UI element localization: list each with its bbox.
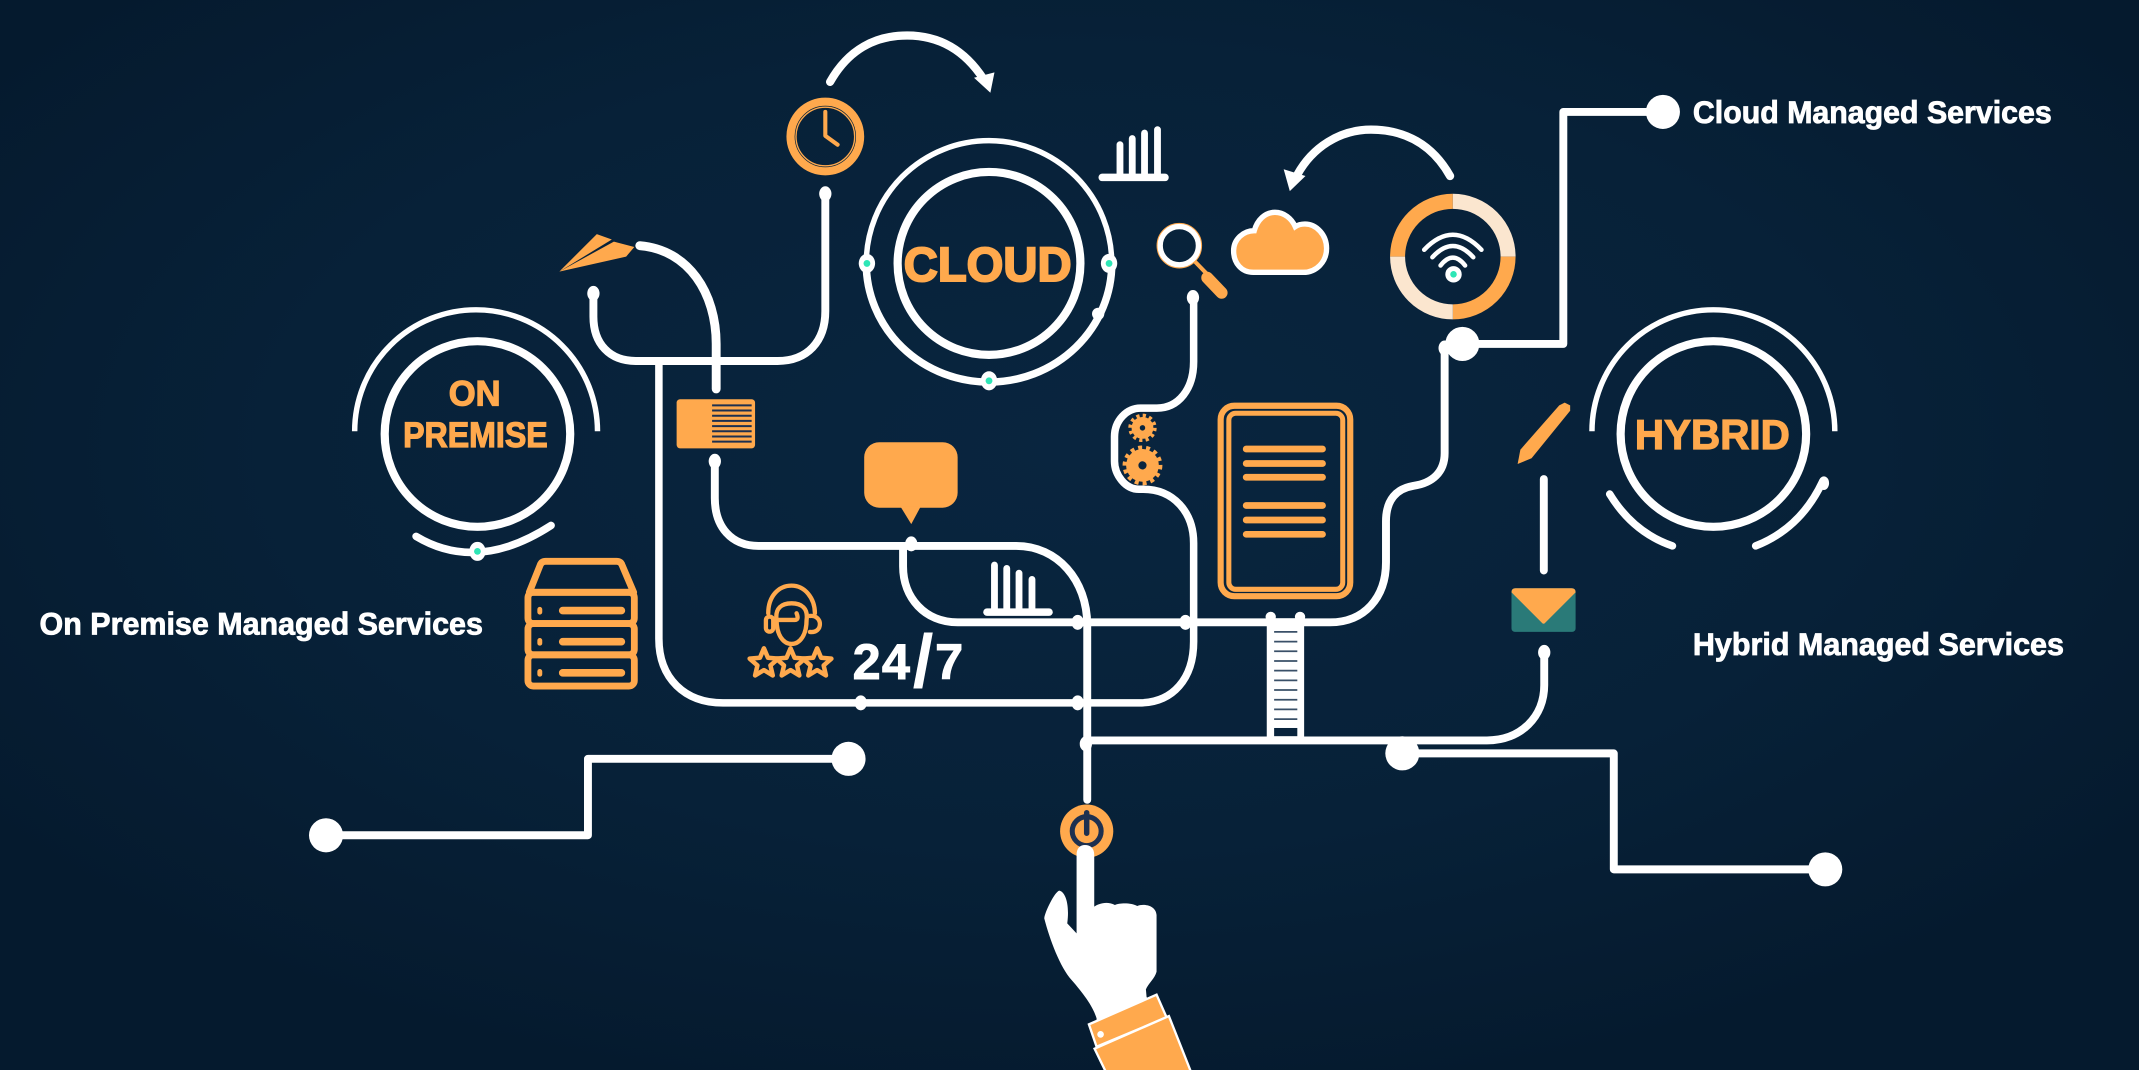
circuit lines network bbox=[326, 112, 1825, 869]
heading: cloud: CLOUD bbox=[904, 238, 1072, 292]
icon: speech bubble bbox=[864, 442, 958, 524]
heading: premise: PREMISE bbox=[403, 415, 548, 455]
heading: hybrid: HYBRID bbox=[1635, 411, 1790, 458]
text: 24/7: / bbox=[913, 619, 934, 703]
line end nodes bbox=[309, 95, 1842, 886]
arrow: upper right counter-clockwise bbox=[1284, 130, 1450, 191]
arrow: top clockwise bbox=[830, 35, 994, 93]
icon: pencil bbox=[1518, 403, 1570, 464]
icon: gears bbox=[1125, 416, 1160, 483]
icon: lower bar chart bbox=[987, 565, 1049, 612]
heading: on premise: ON bbox=[449, 373, 501, 413]
ladder connector bbox=[1266, 612, 1305, 737]
icon: server stack bbox=[528, 561, 634, 686]
panel: cloud circle bbox=[859, 141, 1117, 390]
icon: top bar chart bbox=[1102, 130, 1165, 177]
icon: document bbox=[1221, 406, 1350, 596]
icon: power button bbox=[1060, 805, 1113, 858]
icon: clock bbox=[791, 102, 860, 171]
icon: magnifier bbox=[1157, 224, 1222, 293]
icon: cloud bbox=[1234, 212, 1327, 272]
icon: pointing hand bbox=[1044, 845, 1192, 1070]
icon: envelope bbox=[1511, 588, 1576, 632]
text: 24/7: 24 bbox=[853, 633, 910, 690]
panel: on premise circle bbox=[355, 310, 598, 561]
icon: paper plane bbox=[559, 234, 634, 272]
label: hybrid managed services: Hybrid Managed Services bbox=[1693, 627, 2064, 662]
icon: barcode card bbox=[677, 399, 755, 448]
icon: wifi donut bbox=[1398, 201, 1508, 312]
hybrid connector line bbox=[1541, 479, 1547, 570]
panel: hybrid circle bbox=[1592, 310, 1835, 546]
label: cloud managed services: Cloud Managed Services bbox=[1693, 95, 2052, 130]
icon: support agent with stars bbox=[750, 586, 831, 675]
text: 24/7: 7 bbox=[935, 633, 963, 690]
label: on premise managed services: On Premise Managed Services bbox=[40, 607, 483, 642]
